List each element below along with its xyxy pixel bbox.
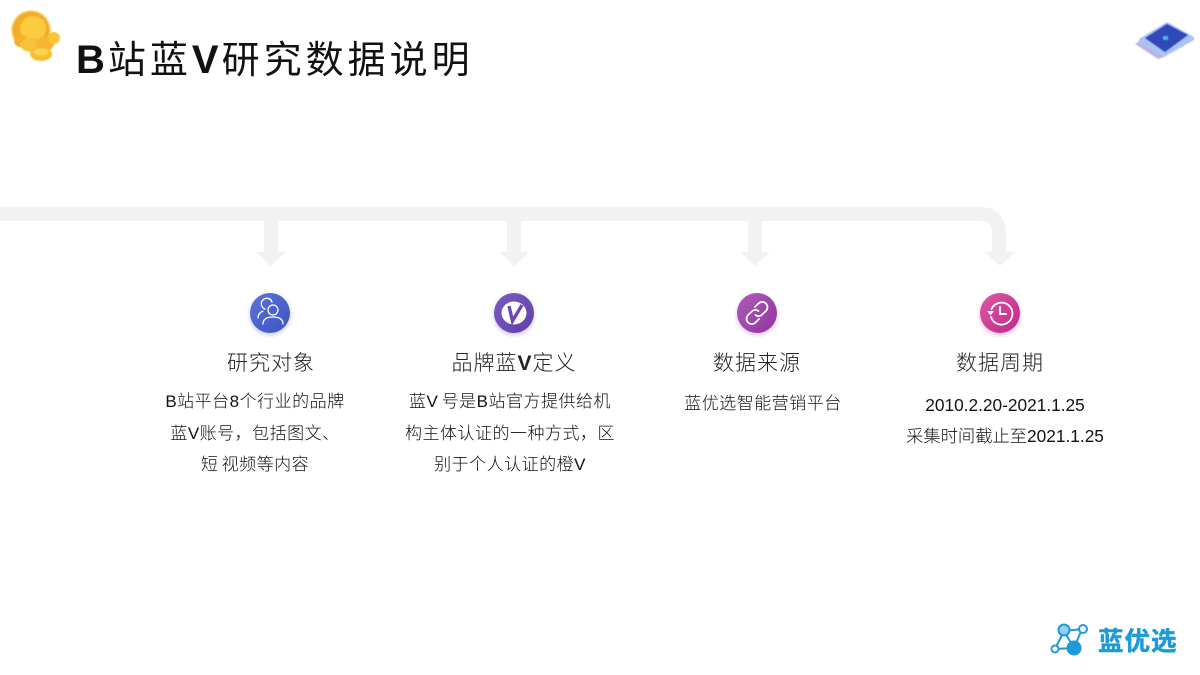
logo wordmark: 蓝优选 [1098,628,1178,656]
text: data source: 蓝优选智能营销平台 [684,394,842,413]
heading: data period: 数据周期 [956,352,1044,375]
column: research subject [165,292,345,474]
icon: V badge [494,293,534,333]
text: research subject: 短 视频等内容 [201,455,309,474]
heading: data source: 数据来源 [713,352,801,375]
column: data period [906,292,1104,446]
text: data period [906,395,1104,446]
icon: people [250,293,290,333]
text: research subject [165,392,345,474]
icon: link [737,293,777,333]
text: brand blue V [405,392,615,474]
icon: gold coins [10,9,61,62]
text: research subject: B站平台8个行业的品牌 [165,392,345,411]
logo: blue youxuan [1050,624,1178,656]
heading: brand blue V: 品牌蓝V定义 [451,352,576,375]
flow arrows connector [0,207,1014,266]
title: B站蓝V研究数据说明 [76,38,474,82]
column: brand blue V [405,292,615,474]
heading: research subject: 研究对象 [227,352,315,375]
text: data period: 采集时间截止至2021.1.25 [906,426,1104,446]
text: brand blue V: 别于个人认证的橙V [434,455,586,474]
text: brand blue V: 蓝V 号是B站官方提供给机 [409,392,611,411]
icon: isometric chip [1135,22,1194,60]
text: data period: 2010.2.20-2021.1.25 [925,395,1085,415]
text: brand blue V: 构主体认证的一种方式，区 [405,424,615,442]
text: research subject: 蓝V账号，包括图文、 [170,424,340,442]
column: data source [684,292,842,413]
icon: molecule [1050,624,1088,656]
icon: history clock [980,293,1020,333]
